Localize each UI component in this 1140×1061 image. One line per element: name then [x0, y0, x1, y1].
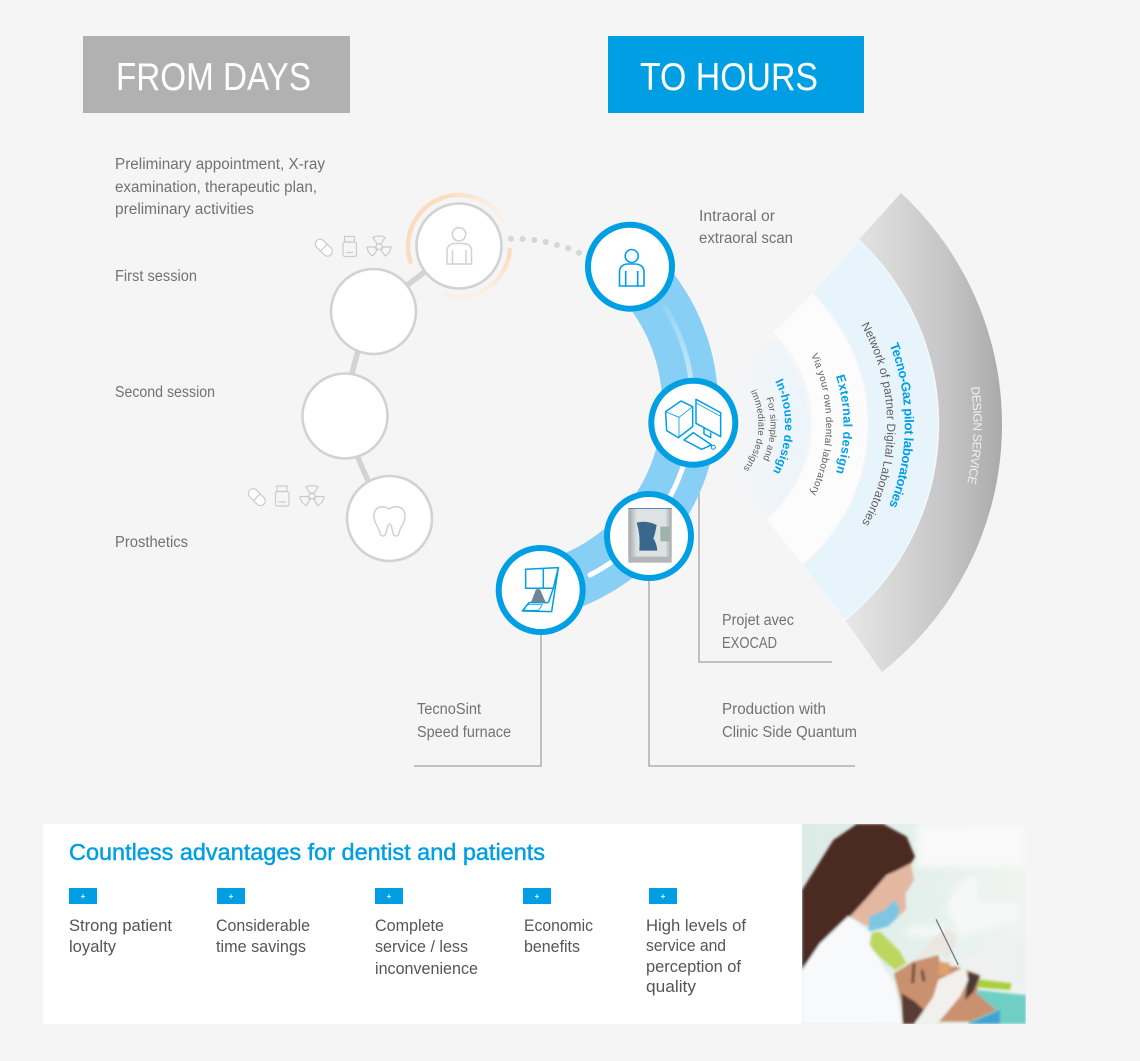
advantage: economic benefits: + [535, 892, 540, 901]
header: to hours [608, 36, 864, 113]
icon: computer [666, 399, 721, 449]
label: prosthetics: Prosthetics [115, 534, 188, 551]
timeline: traditional sessions [302, 195, 510, 561]
sector: external design [765, 293, 868, 565]
label: Tecno-Gaz pilot laboratories: Tecno-Gaz pilot laboratories [890, 342, 914, 508]
sector: design service band [845, 193, 1002, 672]
header: from days [83, 36, 350, 113]
icon: person blue [620, 250, 644, 286]
advantage: service quality: quality [646, 977, 697, 996]
photo: dentist treating patient [802, 824, 1026, 1024]
advantage: complete service: + [387, 892, 392, 901]
label: exocad project: Projet avec [722, 612, 794, 629]
advantage: service quality: perception of [646, 957, 741, 976]
label: tecnosint: TecnoSint [417, 701, 482, 718]
circle: prosthetics [347, 476, 432, 561]
icon: furnace [522, 568, 558, 612]
advantage: time savings: time savings [216, 937, 306, 956]
heading: advantages: Countless advantages for dentist and patients [69, 839, 545, 865]
advantage: time savings: + [229, 892, 234, 901]
advantage: service quality: High levels of [646, 916, 746, 935]
label: second session: Second session [115, 384, 215, 401]
text: preliminary appointment: examination, therapeutic plan, [115, 179, 317, 196]
circle: preliminary appointment [416, 204, 502, 288]
header: from days: FROM DAYS [116, 56, 311, 99]
label: intraoral scan: Intraoral or [699, 208, 775, 225]
label: production [722, 701, 857, 741]
advantage: complete service [375, 888, 478, 978]
orange progress ring [408, 195, 510, 297]
leader lines [414, 460, 855, 766]
header: to hours: TO HOURS [640, 56, 818, 99]
label: exocad project [722, 612, 794, 652]
text: preliminary appointment [115, 156, 325, 218]
label: external design: External design [836, 374, 853, 474]
advantage: patient loyalty: loyalty [69, 937, 116, 956]
icons: pill, bottle, radiation (first session) [313, 236, 391, 258]
advantage: patient loyalty: Strong patient [69, 916, 172, 935]
advantage: complete service: Complete [375, 916, 444, 935]
advantage: complete service: service / less [375, 937, 468, 956]
step: design computer [651, 381, 735, 465]
step: intraoral scan [588, 225, 672, 309]
advantage: economic benefits: Economic [524, 916, 593, 935]
advantage: time savings [216, 888, 310, 956]
blue process band [541, 267, 693, 590]
label: in-house design: In-house design [773, 378, 793, 474]
advantage: service quality: service and [646, 936, 726, 955]
sector: Tecno-Gaz pilot laboratories [802, 240, 938, 620]
label: exocad project: EXOCAD [722, 635, 777, 652]
label: intraoral scan: extraoral scan [699, 230, 793, 247]
icon: tooth [374, 507, 405, 536]
label: tecnosint [417, 701, 511, 741]
icon: person grey [447, 228, 472, 264]
label: first session: First session [115, 268, 197, 285]
text: preliminary appointment: Preliminary appointment, X-ray [115, 156, 325, 173]
image: milling machine [628, 508, 672, 563]
label: intraoral scan [699, 208, 793, 247]
step: tecnosint furnace [499, 548, 583, 632]
advantage: complete service: inconvenience [375, 959, 478, 978]
label: tecnosint: Speed furnace [417, 724, 511, 741]
label: immediate designs: immediate designs [744, 388, 766, 471]
connectors between sessions [345, 246, 459, 518]
label: network of partner labs: Network of partner Digital Laboratories [862, 322, 896, 526]
advantage: time savings: Considerable [216, 916, 310, 935]
advantage: service quality: + [661, 892, 666, 901]
sector: in-house design [686, 339, 808, 520]
text: preliminary appointment: preliminary activities [115, 201, 254, 218]
dotted link between timelines [508, 236, 582, 256]
icons: pill, bottle, radiation (prosthetics) [246, 486, 324, 508]
label: production: Production with [722, 701, 826, 718]
label: production: Clinic Side Quantum [722, 724, 857, 741]
advantage: patient loyalty [69, 888, 172, 956]
advantage: service quality [646, 888, 746, 996]
advantage: economic benefits: benefits [524, 937, 580, 956]
circle: second session [302, 374, 388, 458]
step: clinic side quantum [607, 494, 691, 578]
circle: first session [331, 269, 416, 354]
advantage: economic benefits [523, 888, 593, 956]
fan: design service [744, 193, 1002, 672]
label: via your own dental laboratory: Via your own dental laboratory [810, 352, 834, 496]
label: design service: DESIGN SERVICE [968, 387, 982, 484]
panel: advantages [43, 824, 802, 1024]
label: for simple and: For simple and [763, 396, 778, 462]
advantage: patient loyalty: + [81, 892, 86, 901]
